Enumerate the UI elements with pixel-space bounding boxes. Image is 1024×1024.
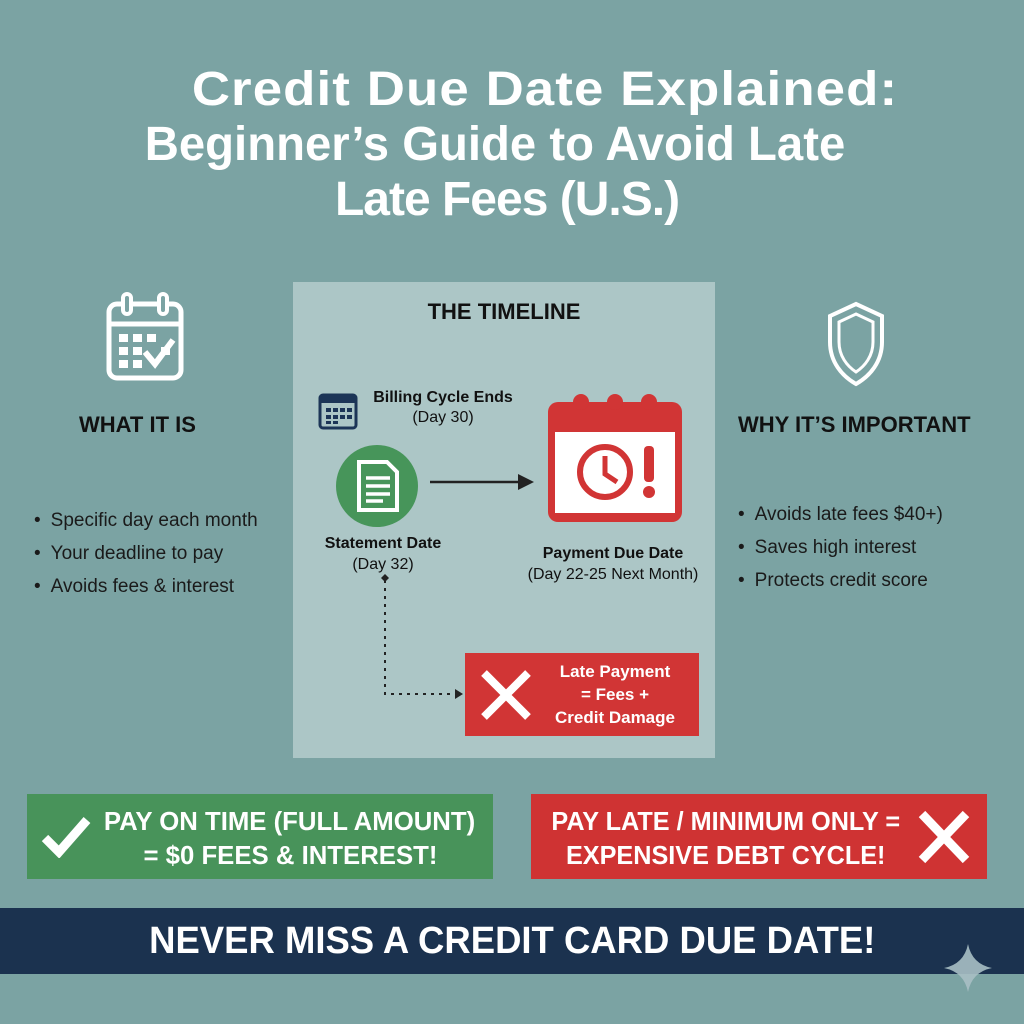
title: Credit Due Date Explained: — [192, 63, 898, 116]
icon: x — [918, 810, 970, 864]
banner: never miss — [0, 908, 1024, 974]
list: what it is: Avoids fees & interest — [51, 576, 234, 597]
icon: shield — [828, 302, 884, 386]
callout: pay on time: PAY ON TIME (FULL AMOUNT) — [104, 806, 476, 836]
list: why it's important: Protects credit score — [755, 570, 928, 591]
text: payment due date — [528, 545, 698, 583]
callout: pay late — [531, 794, 987, 879]
text: statement date — [325, 535, 441, 573]
callout: late payment: Credit Damage — [555, 708, 675, 727]
text: payment due date: (Day 22-25 Next Month) — [528, 566, 698, 583]
text: payment due date: Payment Due Date — [543, 545, 683, 562]
text: billing cycle ends — [373, 389, 513, 426]
callout: late payment: = Fees + — [581, 685, 649, 704]
callout: pay late: PAY LATE / MINIMUM ONLY = — [552, 806, 900, 836]
banner: never miss: NEVER MISS A CREDIT CARD DUE DATE! — [149, 920, 875, 962]
title: Late Fees (U.S.) — [335, 173, 679, 226]
panel: why it's important — [738, 302, 971, 591]
panel: the timeline — [293, 282, 715, 758]
heading: the timeline: THE TIMELINE — [428, 299, 580, 324]
text: statement date: (Day 32) — [352, 556, 414, 573]
arrow: dotted to late payment — [381, 574, 463, 699]
icon: statement document — [336, 445, 418, 527]
list: what it is: Your deadline to pay — [51, 543, 223, 564]
heading: why it's important: WHY IT’S IMPORTANT — [738, 412, 971, 437]
icon: due date calendar — [548, 394, 682, 522]
icon: sparkle — [944, 944, 992, 992]
heading: what it is: WHAT IT IS — [79, 412, 196, 437]
arrow: to due date — [430, 474, 534, 490]
list: why it's important — [738, 504, 943, 591]
title — [145, 63, 898, 226]
list: why it's important: Saves high interest — [755, 537, 916, 558]
list: why it's important: Avoids late fees $40+) — [755, 504, 943, 525]
text: billing cycle ends: (Day 30) — [412, 409, 474, 426]
panel: what it is — [34, 292, 258, 597]
callout: pay on time: = $0 FEES & INTEREST! — [143, 840, 437, 870]
icon: x — [481, 670, 531, 720]
callout: pay late: EXPENSIVE DEBT CYCLE! — [566, 840, 886, 870]
icon: small calendar — [318, 394, 358, 430]
callout: late payment: Late Payment — [560, 662, 670, 681]
text: statement date: Statement Date — [325, 535, 441, 552]
callout: pay on time — [27, 794, 493, 879]
list: what it is: Specific day each month — [51, 510, 258, 531]
icon: check — [42, 817, 90, 858]
callout: late payment — [465, 653, 699, 736]
icon: calendar check — [106, 292, 184, 380]
title: Beginner’s Guide to Avoid Late — [145, 118, 845, 171]
text: billing cycle ends: Billing Cycle Ends — [373, 389, 513, 406]
list: what it is — [34, 510, 258, 597]
